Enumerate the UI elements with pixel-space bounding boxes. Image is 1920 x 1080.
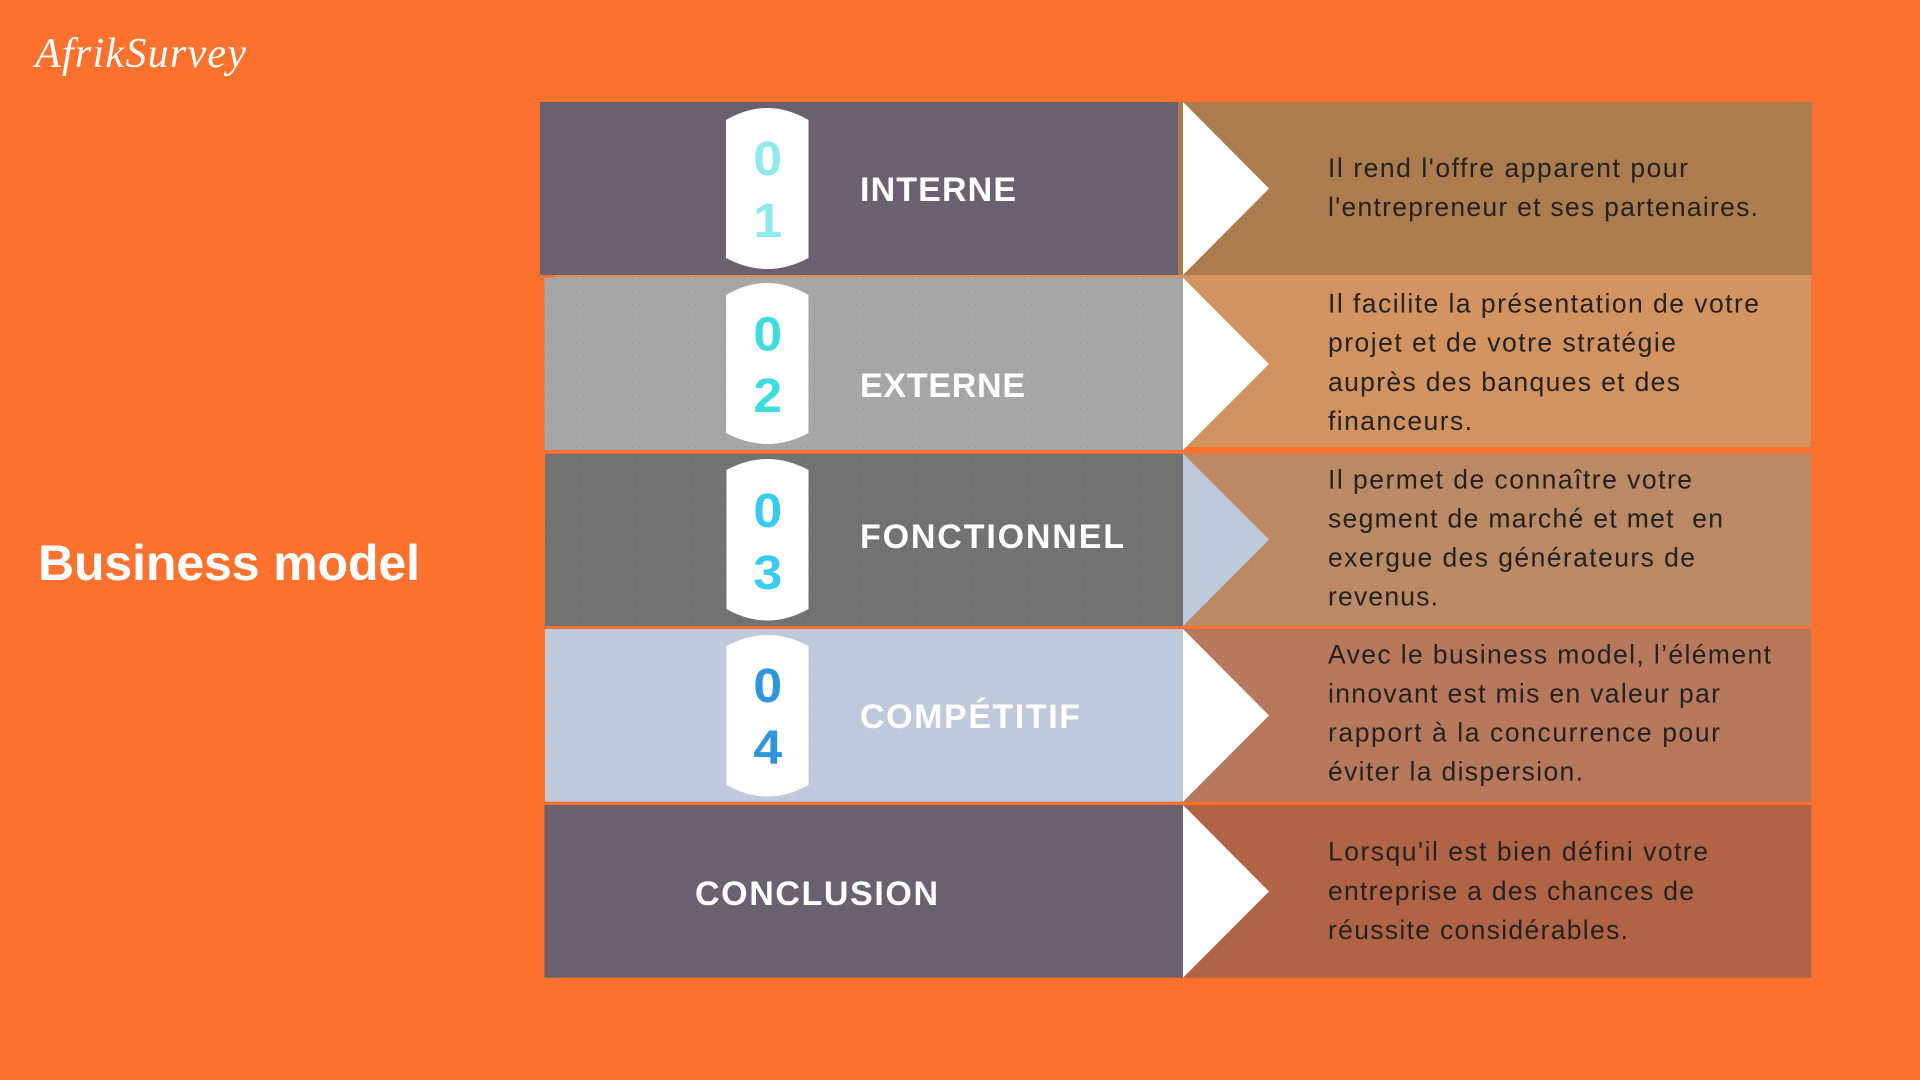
panel: compétitif description — [1183, 629, 1811, 802]
title: Business model: Business model — [38, 535, 420, 591]
arrow: compétitif — [1183, 629, 1269, 802]
logo: AfrikSurvey: AfrikSurvey — [32, 31, 246, 77]
number: 02: 2 — [753, 369, 782, 423]
panel: conclusion description — [1183, 805, 1811, 978]
text: fonctionnel description: revenus. — [1328, 582, 1438, 612]
text: compétitif description — [1328, 639, 1772, 787]
pill: 02 — [726, 283, 808, 444]
row 2: externe — [544, 275, 1811, 450]
text: conclusion description: entreprise a des chances de — [1328, 876, 1694, 906]
row 5: conclusion — [544, 805, 1811, 978]
number: 02 — [753, 307, 782, 423]
number: 01: 0 — [753, 132, 782, 186]
panel: fonctionnel label — [545, 454, 1183, 626]
text: compétitif description: Avec le business model, l’élément — [1328, 639, 1772, 669]
text: externe description — [1328, 289, 1759, 436]
label: FONCTIONNEL: FONCTIONNEL — [860, 518, 1124, 556]
text: externe description: auprès des banques et des — [1328, 367, 1680, 397]
text: compétitif description: éviter la dispersion. — [1328, 757, 1583, 787]
label: CONCLUSION: CONCLUSION — [695, 875, 938, 913]
text: fonctionnel description: exergue des générateurs de — [1328, 543, 1695, 573]
label: COMPÉTITIF: COMPÉTITIF — [860, 698, 1080, 736]
panel: externe description — [555, 275, 1811, 447]
number: 03 — [753, 484, 782, 600]
number: 02: 0 — [753, 307, 782, 361]
text: interne description: Il rend l'offre apparent pour — [1328, 153, 1688, 183]
panel: interne description — [1178, 102, 1812, 275]
text: compétitif description: innovant est mis en valeur par — [1328, 678, 1720, 708]
text: compétitif description: rapport à la concurrence pour — [1328, 718, 1720, 748]
panel: externe label — [544, 278, 1183, 450]
pill: 03 — [726, 459, 808, 620]
number: 03: 0 — [753, 484, 782, 538]
text: externe description: Il facilite la présentation de votre — [1328, 289, 1759, 319]
text: conclusion description: réussite considérables. — [1328, 915, 1628, 945]
number: 04: 4 — [753, 721, 782, 775]
arrow: externe — [1183, 278, 1269, 450]
arrow: interne — [1183, 102, 1269, 275]
label: INTERNE: INTERNE — [860, 171, 1016, 209]
number: 01 — [753, 132, 782, 248]
number: 04 — [753, 659, 782, 775]
text: interne description: l'entrepreneur et ses partenaires. — [1328, 192, 1758, 222]
text: fonctionnel description: segment de marché et met en — [1328, 503, 1723, 533]
number: 03: 3 — [753, 546, 782, 600]
text: fonctionnel description: Il permet de connaître votre — [1328, 464, 1692, 494]
arrow: conclusion — [1183, 805, 1269, 978]
row 1: interne — [540, 102, 1812, 275]
row 4: compétitif — [545, 629, 1811, 802]
text: externe description: financeurs. — [1328, 406, 1472, 436]
row 3: fonctionnel — [545, 454, 1811, 626]
text: conclusion description — [1328, 837, 1708, 945]
number: 04: 0 — [753, 659, 782, 713]
arrow: fonctionnel — [1183, 454, 1269, 626]
pill: 01 — [726, 108, 808, 269]
text: fonctionnel description — [1328, 464, 1723, 612]
panel: interne label — [540, 102, 1178, 275]
panel: fonctionnel description — [1183, 454, 1811, 626]
panel: compétitif label — [545, 629, 1183, 802]
pill: 04 — [726, 635, 808, 796]
text: conclusion description: Lorsqu'il est bien défini votre — [1328, 837, 1708, 867]
text: interne description — [1328, 153, 1758, 222]
label: EXTERNE: EXTERNE — [860, 367, 1025, 405]
text: externe description: projet et de votre stratégie — [1328, 328, 1676, 358]
number: 01: 1 — [753, 194, 782, 248]
panel: conclusion label — [544, 805, 1183, 978]
